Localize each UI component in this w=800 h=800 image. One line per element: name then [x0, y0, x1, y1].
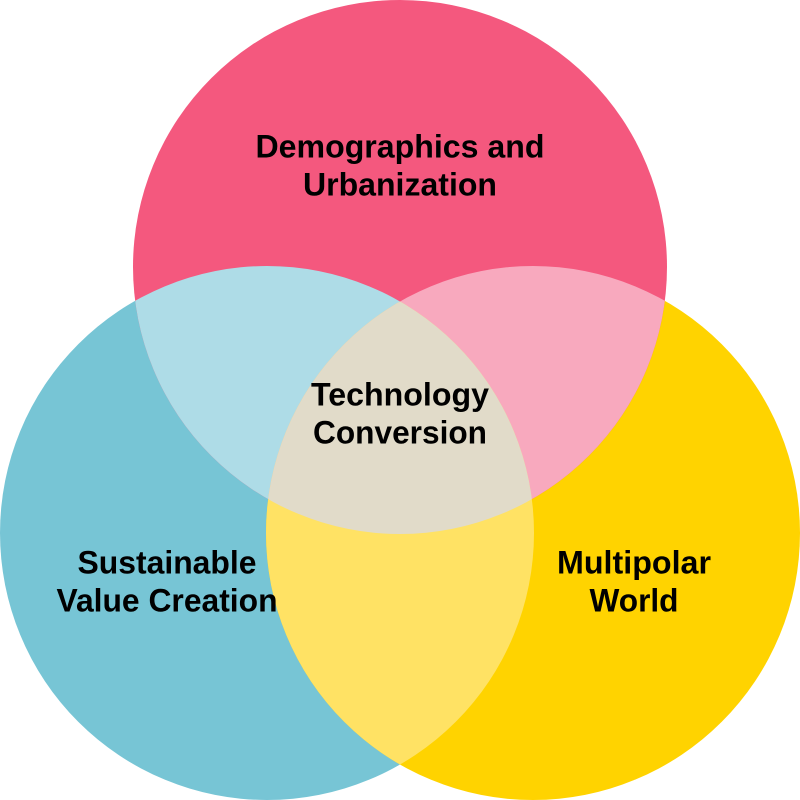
circle: sustainable value creation: [0, 266, 534, 800]
label: multipolar world: [557, 544, 711, 618]
label: multipolar world: World: [590, 582, 678, 618]
circle: demographics and urbanization: [133, 0, 667, 534]
overlap: center of all three: [268, 302, 532, 534]
label: sustainable value creation: Sustainable: [78, 544, 256, 580]
label: technology conversion: [311, 376, 489, 450]
label: technology conversion: Technology: [311, 376, 489, 412]
overlap: sustainable and multipolar: [266, 302, 534, 764]
label: demographics and urbanization: [256, 128, 544, 202]
label: demographics and urbanization: Demographics and: [256, 128, 544, 164]
label: sustainable value creation: [56, 544, 278, 618]
overlap: demographics and sustainable: [135, 266, 400, 500]
overlap: demographics and multipolar: [268, 266, 665, 500]
circle: multipolar world: [266, 266, 800, 800]
label: sustainable value creation: Value Creation: [56, 582, 278, 618]
label: multipolar world: Multipolar: [557, 544, 711, 580]
label: demographics and urbanization: Urbanization: [303, 166, 497, 202]
label: technology conversion: Conversion: [313, 414, 487, 450]
